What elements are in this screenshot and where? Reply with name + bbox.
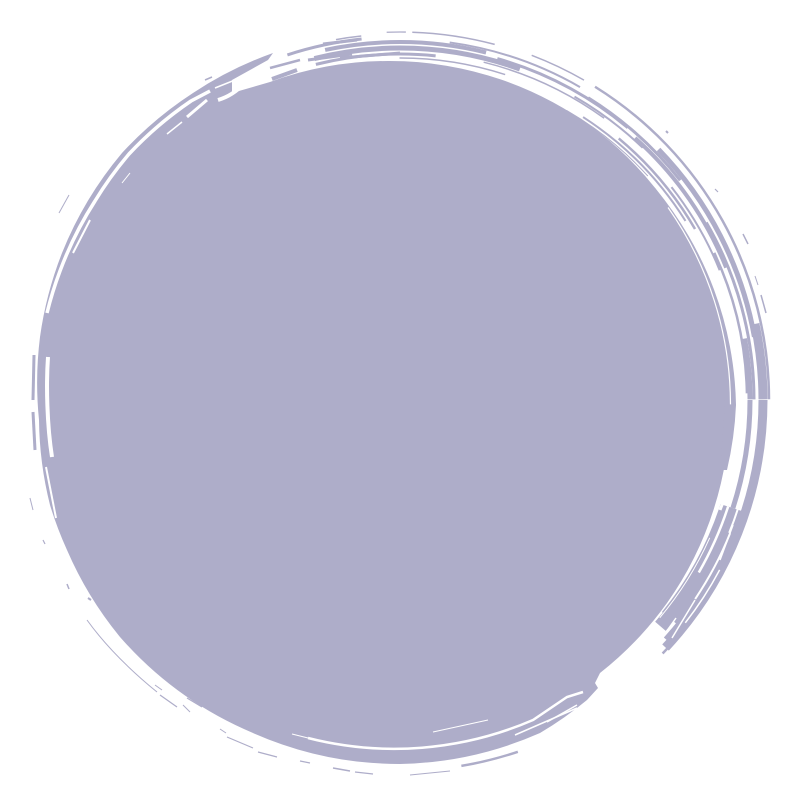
main brush circle body <box>37 53 730 764</box>
right edge sliver of the body <box>655 188 736 470</box>
